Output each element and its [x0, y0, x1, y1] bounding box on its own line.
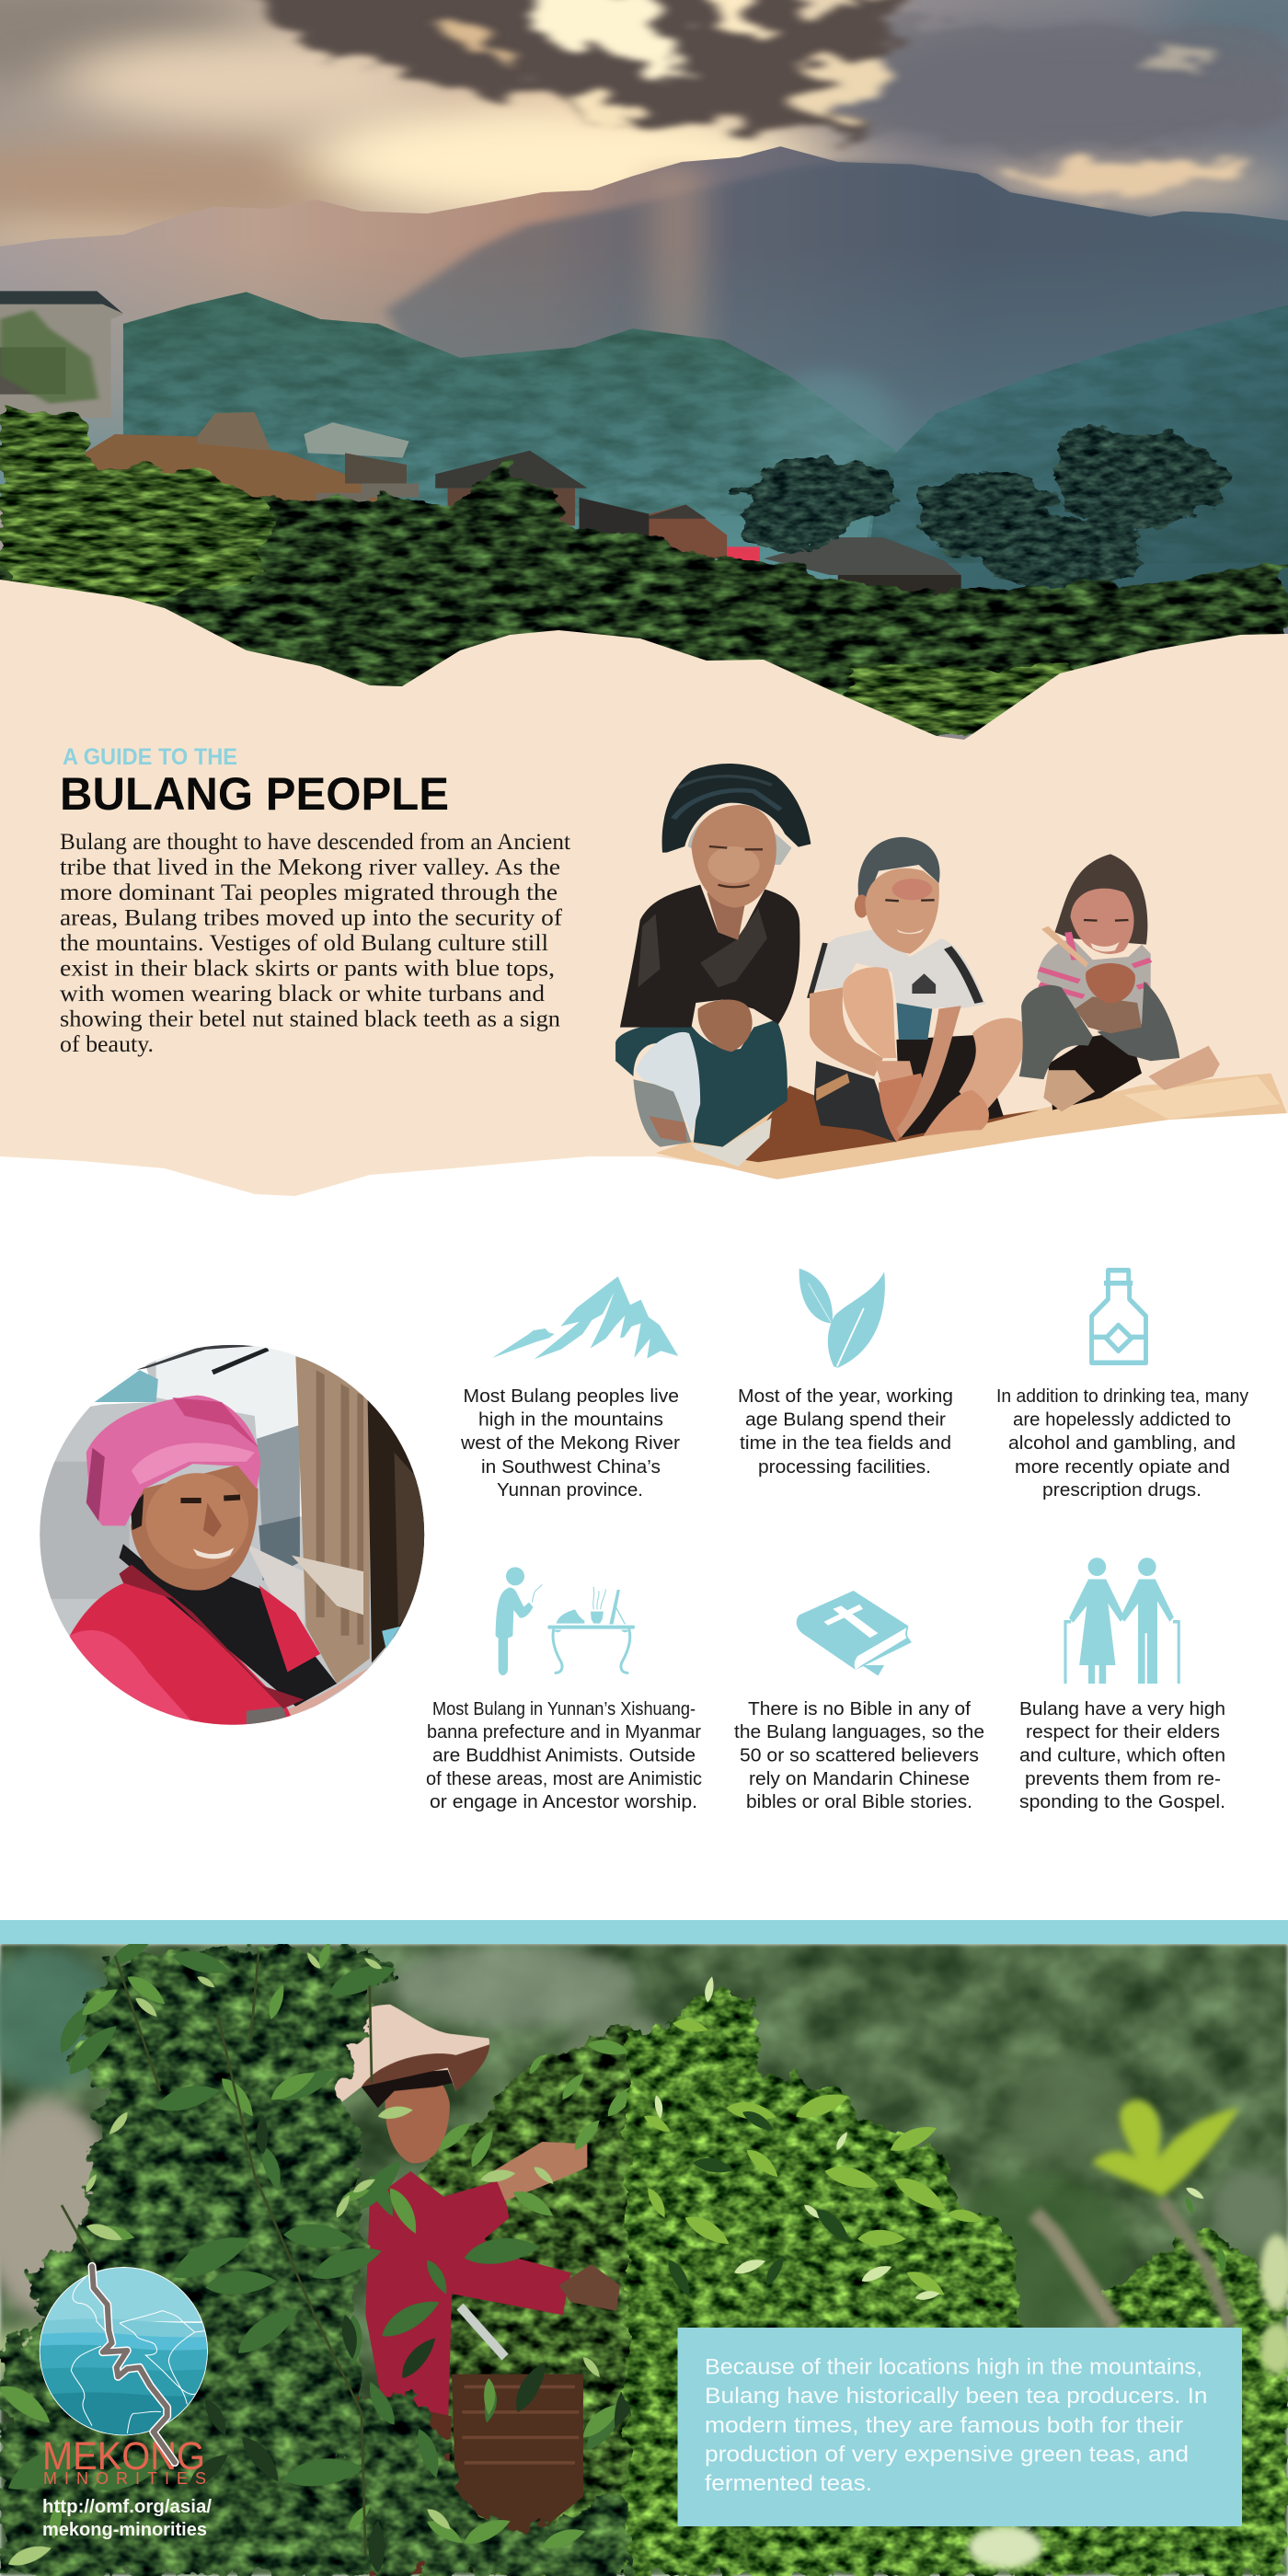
text: religion: of these areas, most are Animistic [426, 1769, 702, 1789]
text: bible access: bibles or oral Bible stories. [746, 1792, 972, 1812]
foreground foliage [0, 460, 1288, 736]
sunlit bush left [627, 1985, 1022, 2576]
callout box: tea production: fermented teas. [705, 2471, 872, 2496]
text: religion: or engage in Ancestor worship. [430, 1792, 697, 1812]
feature: mountains [460, 1276, 680, 1501]
text: tea fields: processing facilities. [758, 1457, 931, 1478]
callout box: tea production: production of very expensive green teas, and [705, 2442, 1189, 2467]
text: tea fields [738, 1386, 953, 1478]
hazy hillside background [0, 1944, 1288, 2576]
text: mountains [460, 1386, 680, 1501]
feature: bible access [734, 1591, 984, 1812]
text: religion: are Buddhist Animists. Outside [432, 1746, 696, 1766]
hero photo: mountain village at sunset [0, 0, 1288, 751]
title block [60, 744, 449, 820]
woman tea picker [325, 2005, 620, 2576]
text: mountains: west of the Mekong River [460, 1433, 680, 1454]
text: tea fields: age Bulang spend their [745, 1409, 946, 1430]
intro paragraph: showing their betel nut stained black teeth as a sign [60, 1006, 561, 1032]
text: tea fields: Most of the year, working [738, 1386, 953, 1407]
text: religion: banna prefecture and in Myanmar [427, 1722, 701, 1742]
circular portrait: woman in pink headscarf [37, 1342, 427, 1727]
storm clouds [247, 0, 1288, 155]
white page area with torn top edge [0, 1113, 1288, 1920]
main tea bush in front [0, 1948, 410, 2576]
back mountain range [0, 146, 1288, 550]
background trees [740, 427, 1224, 592]
text: respect for elders: sponding to the Gospel. [1019, 1792, 1225, 1812]
text: bible access: the Bulang languages, so the [734, 1722, 984, 1742]
text: bible access: rely on Mandarin Chinese [749, 1769, 970, 1789]
text: mountains: high in the mountains [478, 1409, 663, 1430]
website url [42, 2497, 212, 2540]
wordmark: MINORITIES [43, 2469, 206, 2488]
icon: elderly couple with canes [1065, 1558, 1179, 1684]
text: religion [426, 1699, 702, 1812]
foliage over the woman's lower body and basket [341, 2386, 644, 2576]
icon: bible [797, 1591, 912, 1675]
callout box: tea production: Bulang have historically been tea producers. In [705, 2384, 1207, 2409]
text: mountains: Most Bulang peoples live [464, 1386, 679, 1407]
tea leaves [1, 1933, 629, 2500]
text: addiction [996, 1386, 1248, 1501]
text: addiction: In addition to drinking tea, many [996, 1386, 1248, 1407]
website url: http://omf.org/asia/ [42, 2497, 212, 2517]
boy [810, 837, 1028, 1143]
feature: respect for elders [1019, 1558, 1225, 1812]
lower right bush [1014, 2230, 1288, 2576]
icon: mountain [492, 1276, 678, 1359]
text: religion: Most Bulang in Yunnan’s Xishuang- [432, 1699, 696, 1719]
text: respect for elders [1019, 1699, 1225, 1812]
grass patch [855, 666, 1076, 736]
shelters and houses [197, 412, 271, 451]
intro paragraph [60, 830, 570, 1057]
photo cutout: elder woman and two children [615, 764, 1288, 1180]
intro paragraph: of beauty. [60, 1032, 154, 1057]
elder woman [615, 764, 811, 1167]
text: addiction: more recently opiate and [1015, 1457, 1230, 1478]
ground and log [656, 1074, 1288, 1180]
intro paragraph: Bulang are thought to have descended from an Ancient [60, 830, 570, 855]
text: respect for elders: and culture, which often [1019, 1746, 1225, 1766]
intro paragraph: areas, Bulang tribes moved up into the security of [60, 905, 563, 931]
text: addiction: alcohol and gambling, and [1008, 1433, 1236, 1454]
heading: Bulang People: BULANG PEOPLE [60, 768, 449, 820]
text: addiction: are hopelessly addicted to [1013, 1409, 1231, 1430]
map circle with river [37, 2266, 212, 2463]
bottom photo: tea picker among tea bushes [0, 1933, 1288, 2576]
text: respect for elders: respect for their elders [1026, 1722, 1220, 1742]
shadowed central peak [382, 158, 1157, 379]
teal divider band [0, 1920, 1288, 1944]
text: respect for elders: Bulang have a very high [1019, 1699, 1225, 1719]
bush behind the woman [370, 2028, 644, 2576]
feature: addiction [996, 1271, 1248, 1501]
text: bible access [734, 1699, 984, 1812]
teal foothills [123, 292, 1288, 610]
wordmark: MEKONG [42, 2434, 205, 2478]
icon: tea leaves [799, 1269, 885, 1368]
left bamboo leaves [0, 404, 280, 601]
intro paragraph: more dominant Tai peoples migrated through the [60, 880, 558, 905]
text: addiction: prescription drugs. [1042, 1480, 1202, 1501]
intro paragraph: tribe that lived in the Mekong river valley. As the [60, 856, 560, 880]
logo: Mekong Minorities [37, 2266, 212, 2488]
feature: religion [426, 1567, 702, 1812]
kicker: a guide to the: A GUIDE TO THE [63, 744, 237, 770]
callout box: tea production: modern times, they are famous both for their [705, 2413, 1183, 2438]
intro paragraph: the mountains. Vestiges of old Bulang culture still [60, 931, 548, 956]
text: respect for elders: prevents them from re- [1025, 1769, 1221, 1789]
intro paragraph: with women wearing black or white turbans and [60, 982, 546, 1006]
callout box: tea production [677, 2328, 1242, 2526]
text: mountains: Yunnan province. [497, 1480, 643, 1501]
website url: mekong-minorities [42, 2520, 207, 2540]
callout box: tea production: Because of their locations high in the mountains, [705, 2355, 1202, 2379]
cream paper panel with torn edges [0, 580, 1288, 1196]
girl [1019, 854, 1220, 1111]
text: bible access: There is no Bible in any of [748, 1699, 971, 1719]
feature: tea fields [738, 1269, 953, 1478]
soil terrace [85, 434, 377, 502]
icon: bottle [1092, 1271, 1146, 1363]
text: mountains: in Southwest China’s [481, 1457, 661, 1478]
text: tea fields: time in the tea fields and [740, 1433, 951, 1454]
intro paragraph: exist in their black skirts or pants with blue tops, [60, 957, 555, 981]
blurred sprouts and stems [969, 2099, 1288, 2569]
left building [0, 304, 123, 418]
text: bible access: 50 or so scattered believers [740, 1746, 979, 1766]
icon: person at ancestor altar [496, 1567, 635, 1675]
